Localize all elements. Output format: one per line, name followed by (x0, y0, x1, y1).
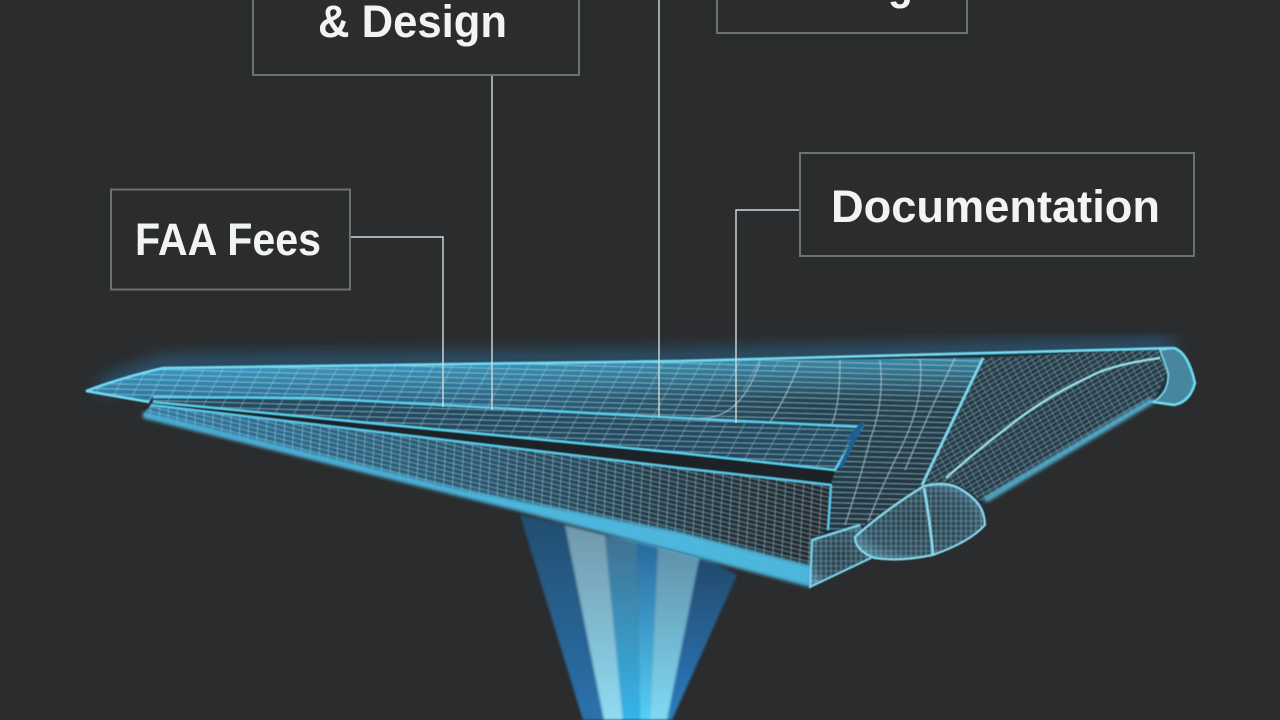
upper surface panel (86, 358, 983, 530)
light beam under wing (520, 515, 737, 720)
label: Documentation (800, 153, 1194, 256)
outer wing panel (922, 348, 1174, 503)
bright structural edges (86, 348, 1195, 530)
connector: FAA Fees (350, 237, 443, 407)
label: FAA Fees (111, 190, 350, 290)
label: Documentation: Documentation (831, 181, 1160, 232)
label: Testing (717, 0, 967, 33)
connector: centre (658, 0, 660, 417)
lower flap surface (143, 405, 831, 570)
label: Design (253, 0, 579, 75)
upper flap panel (153, 397, 862, 470)
wing wireframe (86, 346, 1195, 587)
label: FAA Fees: FAA Fees (135, 214, 321, 265)
connector: Documentation (736, 210, 800, 423)
dark slot (151, 402, 835, 485)
outer edge band (985, 400, 1153, 500)
wing silhouette (86, 348, 1195, 587)
engine nacelle (855, 484, 985, 559)
leading edge band (143, 412, 812, 587)
wing tip cap (1153, 348, 1195, 405)
connector: & Design (491, 75, 493, 410)
lower root panel (810, 525, 871, 587)
wing top glow (100, 346, 1174, 388)
